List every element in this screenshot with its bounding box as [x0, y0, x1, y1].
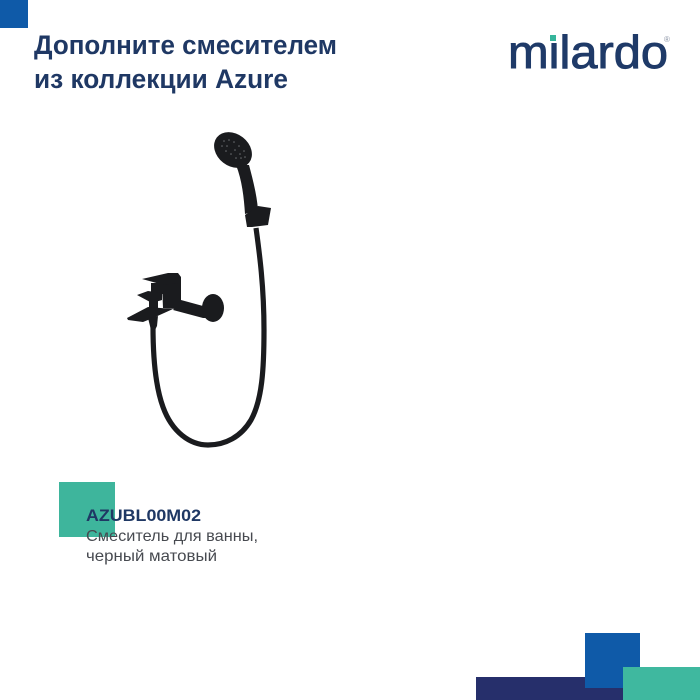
diverter knob: [149, 298, 158, 313]
logo: milardo: ®: [664, 35, 670, 44]
shower hose: [153, 228, 264, 445]
logo: milardo: milardo: [508, 26, 668, 78]
product description: Смеситель для ванны,: [86, 528, 258, 545]
hose holder bracket: [245, 206, 271, 227]
lever neck: [151, 283, 163, 294]
shower head: [207, 125, 259, 175]
spout: [127, 307, 173, 322]
product description: [86, 528, 258, 565]
product description: черный матовый: [86, 548, 217, 565]
title: Дополните смесителем: [34, 30, 337, 60]
teal square behind product caption: [59, 482, 115, 537]
title: [34, 30, 337, 94]
hose connector: [148, 316, 158, 330]
product image: shower faucet set: [127, 125, 271, 445]
title: из коллекции Azure: [34, 64, 288, 94]
diverter plate: [137, 291, 162, 303]
product code: AZUBL00M02: [86, 506, 201, 525]
corner square: top left: [0, 0, 28, 28]
shower handle: [236, 165, 258, 214]
wall flange: [202, 294, 224, 322]
corner blocks: bottom right: [476, 633, 700, 700]
top lever: [142, 273, 181, 285]
mixer body: [162, 277, 181, 309]
arm to wall: [173, 300, 207, 318]
